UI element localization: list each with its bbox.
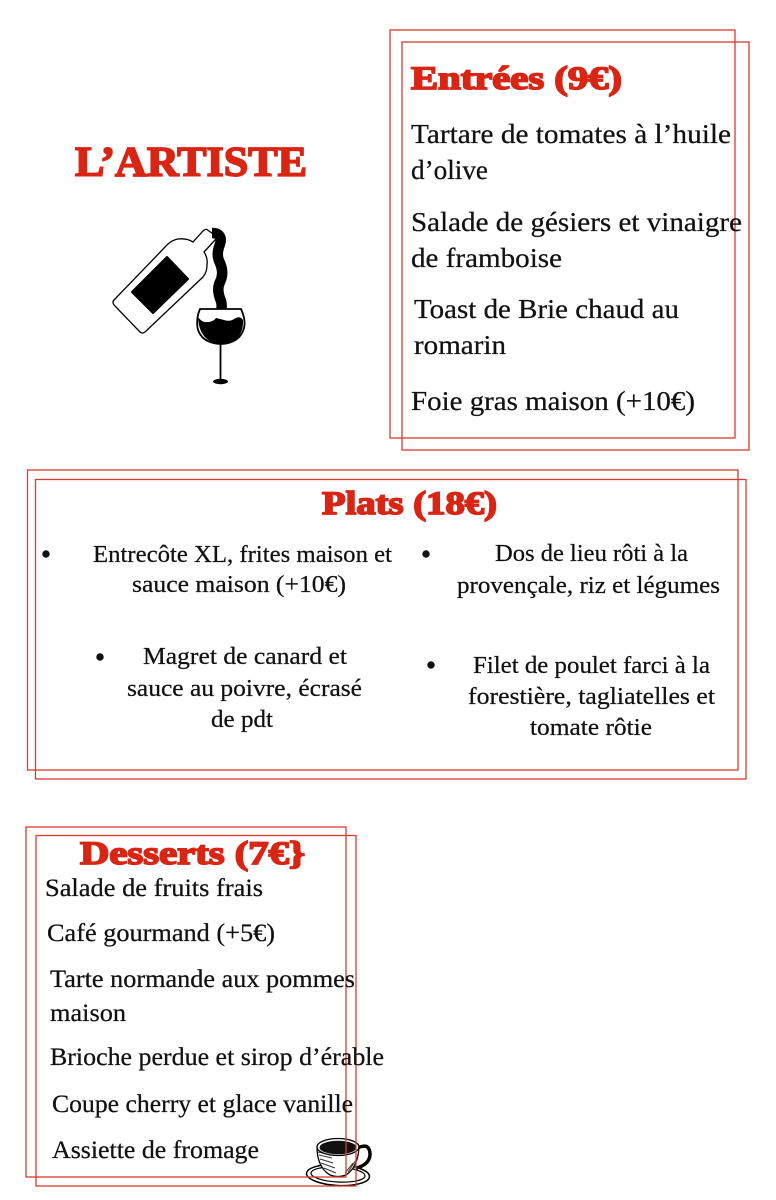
- heading: entrées: Entrées (9€): [411, 61, 622, 97]
- icon: coffee cup on saucer: [306, 1138, 370, 1187]
- panel: entrées: [390, 30, 749, 450]
- item: toast de brie: [414, 294, 680, 360]
- item: toast de brie: romarin: [414, 330, 507, 360]
- heading: desserts: Desserts (7€}: [80, 836, 305, 872]
- item: magret: sauce au poivre, écrasé: [127, 676, 362, 702]
- heading: plats: Plats (18€): [322, 486, 497, 522]
- item: salade de fruits: Salade de fruits frais: [45, 875, 263, 902]
- item: foie gras: Foie gras maison (+10€): [411, 386, 695, 416]
- item: toast de brie: Toast de Brie chaud au: [414, 294, 680, 324]
- title: L’ARTISTE: [75, 140, 307, 186]
- item: assiette de fromage: Assiette de fromage: [52, 1137, 259, 1164]
- item: tarte normande: [50, 966, 355, 1027]
- item: tartare: d’olive: [411, 155, 488, 185]
- item: filet de poulet: forestière, tagliatelles et: [468, 684, 715, 710]
- item: dos de lieu: Dos de lieu rôti à la: [495, 541, 688, 567]
- item: salade de gésiers: [411, 207, 742, 273]
- item: coupe cherry: Coupe cherry et glace vanille: [52, 1091, 353, 1118]
- item: magret: de pdt: [211, 707, 273, 733]
- item: magret: [96, 644, 362, 733]
- item: magret: Magret de canard et: [143, 644, 347, 670]
- item: tartare: [411, 119, 731, 185]
- item: entrecôte: Entrecôte XL, frites maison et: [93, 542, 392, 568]
- item: salade de gésiers: Salade de gésiers et vinaigre: [411, 207, 742, 237]
- panel: plats: [28, 470, 746, 779]
- item: filet de poulet: [427, 653, 715, 741]
- item: dos de lieu: provençale, riz et légumes: [457, 573, 720, 599]
- item: entrecôte: sauce maison (+10€): [132, 572, 346, 598]
- icon: wine bottle pouring into glass: [113, 229, 245, 384]
- item: dos de lieu: [422, 541, 720, 599]
- item: tarte normande: Tarte normande aux pommes: [50, 966, 355, 993]
- item: entrecôte: [42, 542, 392, 598]
- item: filet de poulet: tomate rôtie: [530, 715, 652, 741]
- item: tartare: Tartare de tomates à l’huile: [411, 119, 731, 149]
- item: brioche perdue: Brioche perdue et sirop d’érable: [50, 1044, 384, 1071]
- panel: desserts: [26, 827, 384, 1186]
- item: filet de poulet: Filet de poulet farci à la: [473, 653, 710, 679]
- item: salade de gésiers: de framboise: [411, 243, 562, 273]
- item: café gourmand: Café gourmand (+5€): [47, 920, 275, 947]
- item: tarte normande: maison: [50, 1000, 127, 1027]
